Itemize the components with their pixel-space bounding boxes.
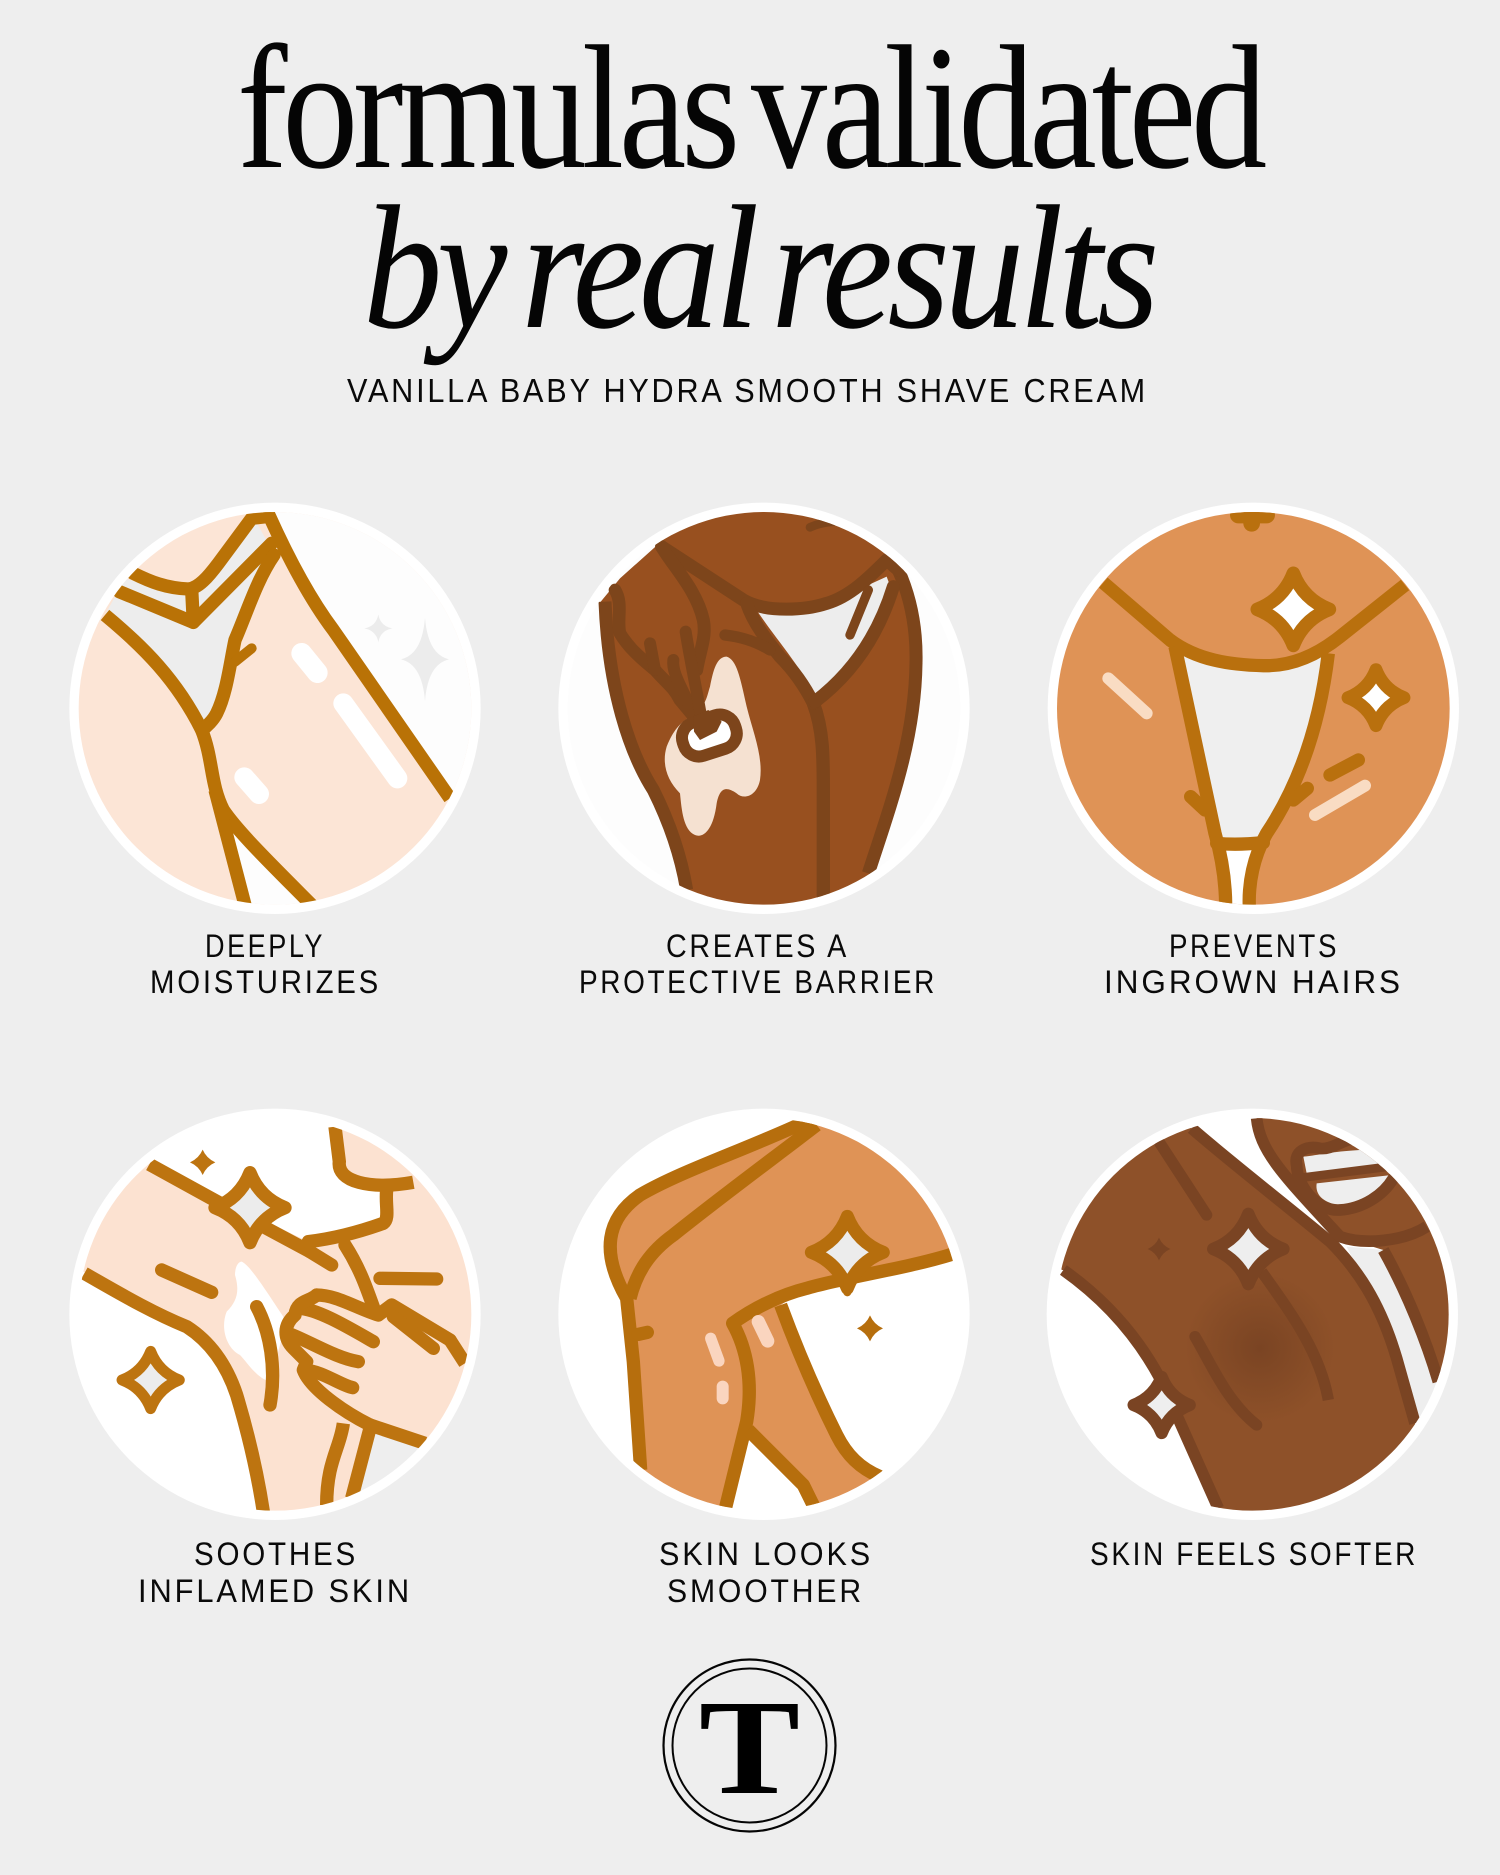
panel: prevents ingrown hairs (1048, 502, 1459, 994)
label: skin looks smoother: SMOOTHER (667, 1573, 864, 1609)
label: prevents ingrown hairs: INGROWN HAIRS (1104, 964, 1403, 1000)
label: soothes inflamed skin: SOOTHES (194, 1536, 358, 1572)
label: deeply moisturizes (150, 928, 381, 1000)
logo: T monogram in double ring: T (699, 1673, 800, 1823)
title (237, 10, 1266, 366)
panel: creates a protective barrier (558, 502, 970, 994)
label: creates a protective barrier (579, 928, 937, 1000)
icon: hand applying cream on light skin (50, 1095, 483, 1528)
label: soothes inflamed skin: INFLAMED SKIN (138, 1573, 412, 1609)
label: skin looks smoother (659, 1536, 873, 1609)
logo: T monogram in double ring (664, 1660, 836, 1832)
icon: hand over leg on deep skin (1046, 1108, 1458, 1520)
title: results (771, 170, 1155, 366)
label: skin looks smoother: SKIN LOOKS (659, 1536, 873, 1572)
icon: thigh and underwear on light skin (70, 502, 480, 914)
label: prevents ingrown hairs: PREVENTS (1169, 928, 1339, 964)
panel: skin looks smoother (558, 1095, 973, 1609)
icon: razor shaving on deep skin (558, 502, 970, 914)
label: deeply moisturizes: MOISTURIZES (150, 964, 381, 1000)
label: deeply moisturizes: DEEPLY (205, 928, 325, 964)
label: skin feels softer: SKIN FEELS SOFTER (1090, 1536, 1418, 1572)
title: real (521, 170, 757, 366)
panel: deeply moisturizes (70, 502, 480, 994)
title: formulas (237, 10, 735, 206)
icon: bikini area on tan skin (1048, 502, 1459, 914)
subtitle: VANILLA BABY HYDRA SMOOTH SHAVE CREAM (347, 372, 1148, 409)
icon: bent knee on tan skin (558, 1095, 973, 1528)
panel: skin feels softer (1046, 1108, 1458, 1566)
label: soothes inflamed skin (138, 1536, 412, 1609)
label: creates a protective barrier: PROTECTIVE BARRIER (579, 964, 937, 1000)
title: validated (751, 10, 1266, 206)
panel: soothes inflamed skin (50, 1095, 483, 1609)
label: creates a protective barrier: CREATES A (666, 928, 849, 964)
label: prevents ingrown hairs (1104, 928, 1403, 1000)
title: by (363, 170, 508, 366)
